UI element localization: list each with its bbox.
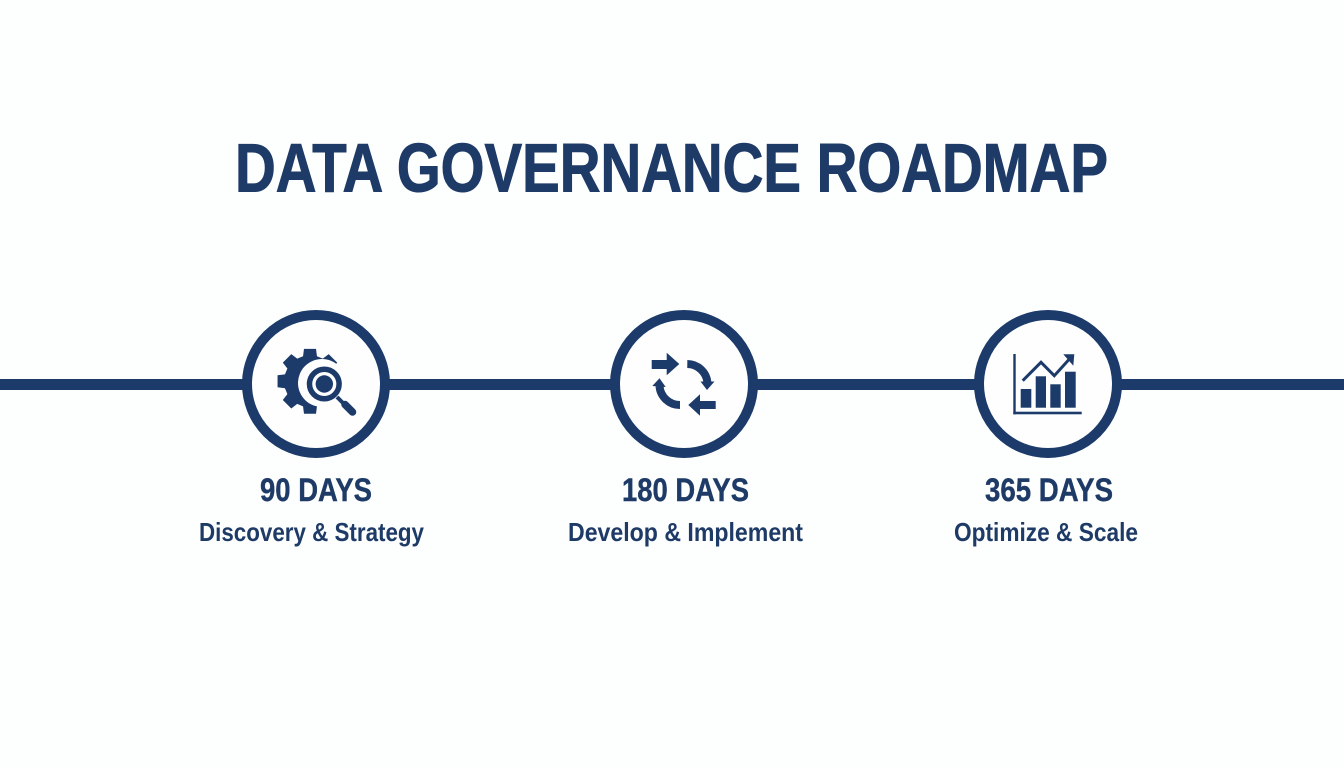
- icon: growth bar chart: [1013, 354, 1082, 414]
- milestone: 180 days: [568, 315, 803, 547]
- circle node 1: [247, 315, 385, 453]
- title: DATA GOVERNANCE ROADMAP: [235, 130, 1108, 206]
- milestone: 365 days: [954, 315, 1138, 547]
- icon: gear with magnifying glass: [278, 349, 360, 420]
- label: 90 days: 90 DAYS: [260, 472, 372, 508]
- circle node 3: [979, 315, 1117, 453]
- description: develop and implement: Develop & Implement: [568, 517, 803, 547]
- description: discovery and strategy: Discovery & Strategy: [199, 517, 424, 547]
- description: optimize and scale: Optimize & Scale: [954, 517, 1138, 547]
- milestone: 90 days: [199, 315, 424, 547]
- timeline line: [0, 379, 1344, 390]
- label: 180 days: 180 DAYS: [622, 472, 749, 508]
- icon: cycle arrows: [652, 353, 716, 416]
- circle node 2: [615, 315, 753, 453]
- label: 365 days: 365 DAYS: [985, 472, 1113, 508]
